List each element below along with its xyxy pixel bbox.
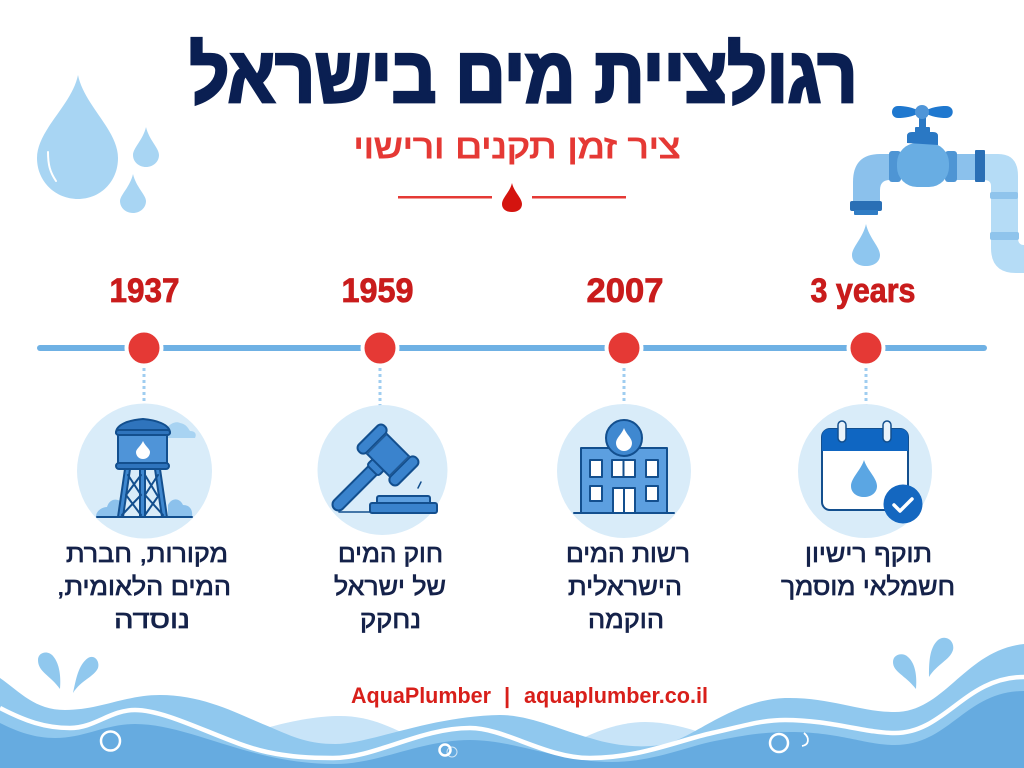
splash droplets right [893, 638, 953, 689]
year 1937: 1937 [110, 272, 180, 310]
subtitle: ציר זמן תקנים ורישוי [354, 128, 680, 165]
text: water law: נחקק [360, 606, 421, 634]
footer brand and website: aquaplumber.co.il [524, 683, 708, 708]
text: water authority: רשות המים [566, 540, 690, 568]
text: Mekorot: המים הלאומית, [57, 573, 231, 601]
title: רגולציית מים בישראל [190, 31, 858, 119]
icon: gavel [314, 405, 448, 535]
text: electrician license: חשמלאי מוסמך [781, 573, 955, 601]
divider with red drop [398, 183, 626, 212]
text: electrician license: תוקף רישיון [805, 540, 932, 568]
footer brand and website [351, 683, 708, 708]
text: water authority: הישראלית [568, 573, 682, 601]
text: water authority [566, 540, 690, 634]
year 2007: 2007 [586, 272, 664, 310]
icon: calendar with check [798, 404, 932, 538]
faucet illustration [850, 105, 1024, 273]
text: water law: חוק המים [338, 540, 443, 568]
bubbles in the water [101, 732, 808, 757]
footer brand and website: | [504, 683, 510, 708]
icon: water authority building [557, 404, 691, 538]
text: electrician license [781, 540, 955, 601]
text: Mekorot: מקורות, חברת [66, 540, 228, 568]
year 1959: 1959 [342, 272, 414, 310]
icon: water tower [77, 404, 212, 538]
milestone dots [126, 330, 884, 366]
splash droplets left [38, 653, 98, 693]
text: Mekorot [57, 540, 231, 634]
text: water law [334, 540, 446, 634]
timeline line [40, 348, 984, 406]
text: water law: של ישראל [334, 573, 446, 601]
footer brand and website: AquaPlumber [351, 683, 491, 708]
water drops top left [37, 75, 159, 213]
bottom water waves [0, 644, 1024, 768]
text: Mekorot: נוסדה [114, 606, 190, 634]
text: water authority: הוקמה [588, 606, 664, 634]
label 3 years: 3 years [810, 272, 916, 310]
